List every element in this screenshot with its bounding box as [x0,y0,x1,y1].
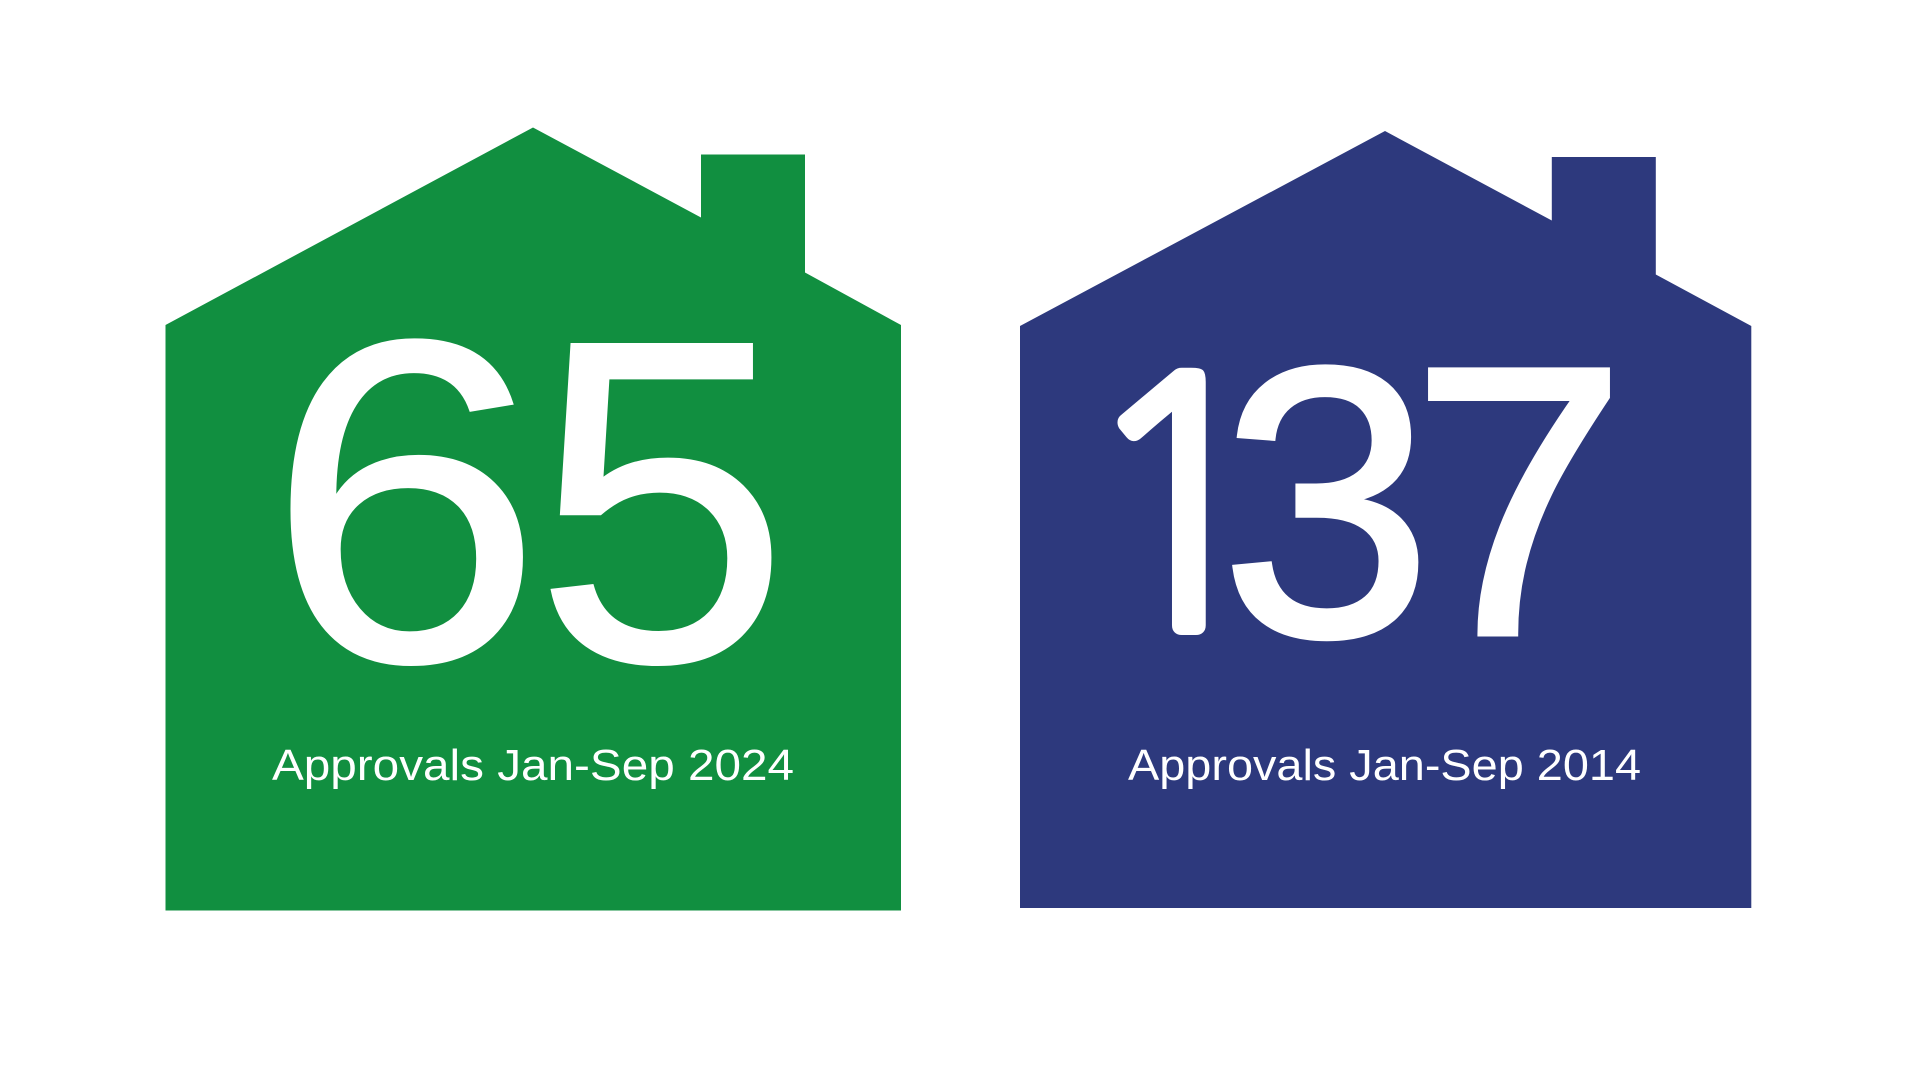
big number: 137 [1073,286,1627,717]
icon: green house shape [166,128,901,910]
big number: 137: 1 [1073,334,1283,679]
big number: 65 [266,244,790,758]
big number: 137: 7 [1411,286,1627,715]
big number: 65: 5 [533,244,790,758]
big number: 137: 3 [1220,288,1433,717]
panel: approvals 2014 house [1020,131,1751,908]
panel: approvals 2024 house [166,128,901,910]
big number: 65: 6 [266,245,544,758]
label: approvals 2014: Approvals Jan-Sep 2014 [1128,741,1641,790]
icon: navy house shape [1020,131,1751,908]
label: approvals 2024: Approvals Jan-Sep 2024 [272,741,794,790]
